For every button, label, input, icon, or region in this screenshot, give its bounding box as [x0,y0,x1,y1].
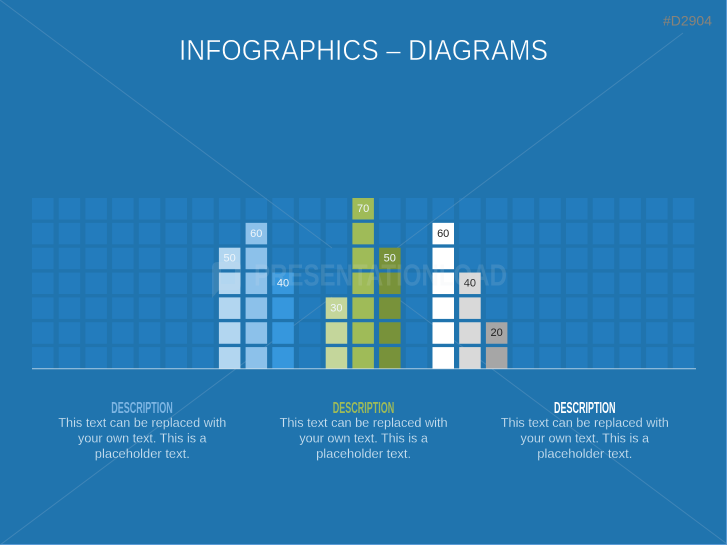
watermark: PRESENTATIONLOAD [254,258,507,292]
text block: description 2: This text can be replaced with [280,416,448,430]
bar: green 30 [326,297,347,369]
bar: green 70 [352,198,374,369]
bar: blue 50 [219,248,240,369]
reference code: #D2904 [663,12,712,28]
bar: grey 20 [486,322,507,369]
bar: blue 40 [272,273,294,369]
bar: white 60: 60 [437,228,449,240]
text block: description 1: DESCRIPTION [111,400,173,417]
text block: description 1: This text can be replaced with [58,416,226,430]
text block: description 2: your own text. This is a [299,432,428,446]
text block: description 3: This text can be replaced with [501,416,669,430]
text block: description 1: your own text. This is a [78,432,207,446]
chart: green bars [326,198,401,369]
icon: watermark flag [212,262,241,298]
watermark [212,258,507,298]
text block: description 3 [501,400,669,461]
text block: description 2: DESCRIPTION [333,400,394,417]
bar: green 50 [379,248,401,369]
bar: blue 60 [246,223,267,369]
chart: white and grey bars [432,223,507,369]
bar: green 70: 70 [357,203,369,215]
bar: blue 60: 60 [250,228,262,240]
bar: grey 20: 20 [490,327,503,339]
bar: light grey 40: 40 [464,278,476,290]
text block: description 3: DESCRIPTION [554,400,616,417]
bar: light grey 40 [459,273,481,369]
bar: blue 40: 40 [277,278,289,290]
text block: description 1 [58,400,226,461]
title: INFOGRAPHICS – DIAGRAMS [179,35,548,67]
text block: description 3: your own text. This is a [521,432,649,446]
chart: blue bars [219,223,294,369]
chart baseline [32,367,696,370]
bar: green 50: 50 [384,253,396,265]
text block: description 2 [280,400,448,461]
bar: green 30: 30 [330,302,343,314]
text block: description 3: placeholder text. [537,447,632,461]
text block: description 2: placeholder text. [316,447,411,461]
bar: white 60 [432,223,454,369]
bar: blue 50: 50 [223,253,236,265]
background grid of squares [32,198,694,369]
text block: description 1: placeholder text. [95,447,190,461]
